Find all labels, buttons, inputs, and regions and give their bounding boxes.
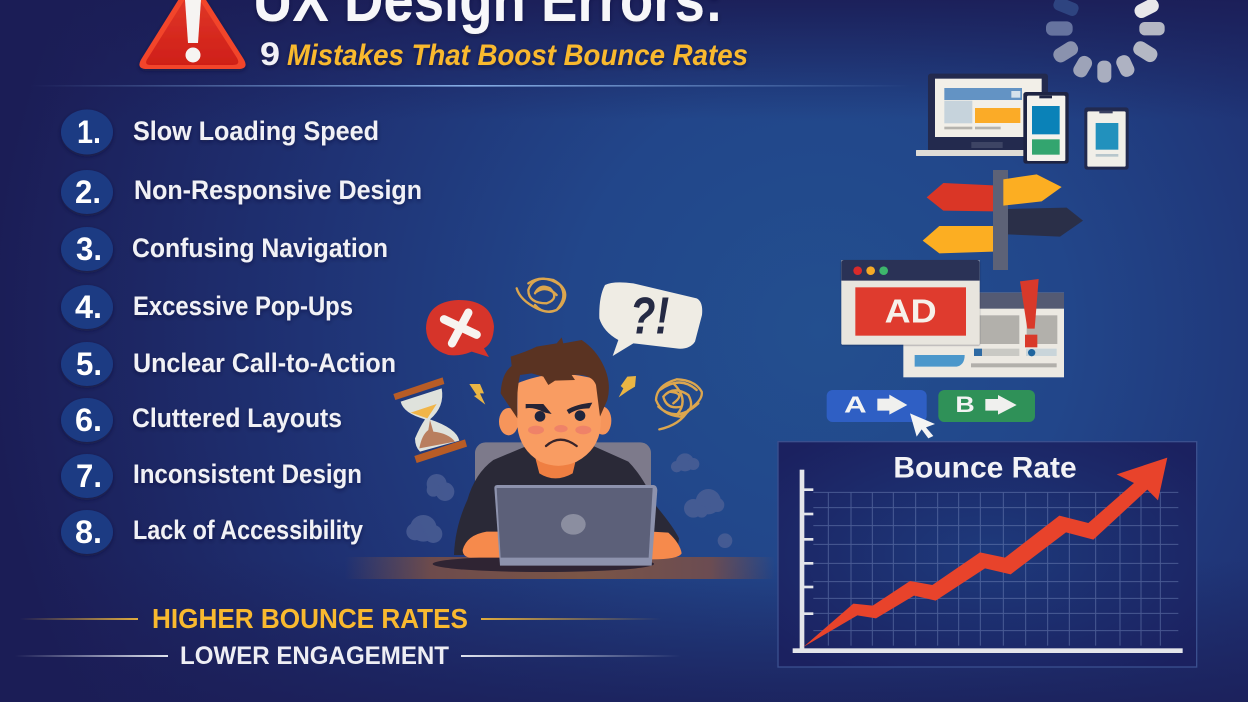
- torso: [454, 446, 679, 555]
- front ad window: [841, 260, 980, 345]
- face: [517, 374, 601, 466]
- cross speech bubble: [426, 300, 494, 357]
- illustration: frustrated user at laptop: [393, 279, 732, 572]
- item 1: Slow Loading Speed: 1.: [77, 114, 101, 150]
- item 2: Non-Responsive Design: [61, 170, 422, 214]
- item 4: Excessive Pop-Ups: 4.: [75, 289, 102, 325]
- loading spinner: [1046, 0, 1165, 83]
- item 1: Slow Loading Speed: Slow Loading Speed: [133, 116, 379, 146]
- hourglass: [393, 377, 467, 463]
- callout: higher bounce rates: HIGHER BOUNCE RATES: [152, 603, 468, 634]
- desk shadow: [433, 556, 654, 572]
- button B: B: [955, 392, 975, 417]
- signpost: [923, 170, 1083, 270]
- item 6: Cluttered Layouts: [61, 398, 342, 442]
- item 5: Unclear Call-to-Action: [61, 342, 396, 386]
- scribble top: [517, 279, 565, 312]
- grid: [813, 492, 1178, 646]
- item 8: Lack of Accessibility: Lack of Accessibility: [133, 515, 363, 545]
- item 6: Cluttered Layouts: Cluttered Layouts: [132, 403, 342, 433]
- item 7: Inconsistent Design: [61, 454, 362, 498]
- phone right: [1084, 107, 1129, 170]
- gold sign top: [1003, 174, 1062, 206]
- neck: [535, 457, 577, 478]
- dark sign: [1007, 208, 1083, 237]
- item 5: Unclear Call-to-Action: 5.: [76, 346, 102, 382]
- item 8: Lack of Accessibility: [61, 510, 363, 554]
- item 4: Excessive Pop-Ups: [61, 285, 353, 329]
- question speech bubble: [599, 282, 702, 356]
- item 8: Lack of Accessibility: 8.: [75, 514, 102, 550]
- red sign: [927, 183, 993, 211]
- eyes: [535, 410, 585, 422]
- responsive devices: [916, 74, 1129, 170]
- hair: [501, 337, 609, 418]
- lightning bolts: [469, 376, 636, 405]
- ears: [499, 407, 611, 435]
- item 3: Confusing Navigation: [61, 227, 388, 271]
- rising red arrow: [803, 458, 1167, 647]
- item 1: Slow Loading Speed: [61, 110, 379, 154]
- subtitle: 9: [260, 36, 280, 72]
- item 2: Non-Responsive Design: Non-Responsive Design: [134, 175, 422, 205]
- chart title: Bounce Rate: [893, 452, 1077, 485]
- hands: [463, 532, 682, 559]
- item 4: Excessive Pop-Ups: Excessive Pop-Ups: [133, 291, 353, 321]
- question speech bubble: ?!: [630, 287, 669, 345]
- item 3: Confusing Navigation: Confusing Navigation: [132, 233, 388, 263]
- button A: A: [844, 392, 867, 418]
- icon: warning triangle: [139, 0, 246, 69]
- item 7: Inconsistent Design: Inconsistent Design: [133, 459, 362, 489]
- eyebrows: [526, 403, 592, 414]
- desk: [345, 557, 775, 579]
- cursor: [910, 413, 935, 438]
- item 6: Cluttered Layouts: 6.: [75, 402, 102, 438]
- item 7: Inconsistent Design: 7.: [76, 458, 102, 494]
- A/B test buttons: [827, 390, 1035, 438]
- mouth: [546, 440, 577, 446]
- panel: bounce rate chart: [778, 442, 1197, 667]
- front ad window: AD: [885, 294, 937, 331]
- exclamation mark: [1020, 279, 1039, 347]
- axes: [793, 470, 1183, 653]
- item 2: Non-Responsive Design: 2.: [75, 174, 101, 210]
- button A: [827, 390, 927, 422]
- list of mistakes: [61, 110, 422, 554]
- button B: [938, 390, 1035, 422]
- item 3: Confusing Navigation: 3.: [76, 231, 102, 267]
- subtitle: Mistakes That Boost Bounce Rates: [287, 39, 748, 72]
- cheeks and nose: [528, 425, 591, 434]
- back window: [903, 293, 1064, 377]
- gold sign bottom: [923, 226, 993, 253]
- laptop: [494, 485, 657, 566]
- phone front: [1023, 92, 1069, 164]
- pop-up ad windows: [841, 260, 1064, 377]
- header divider: [30, 85, 910, 87]
- post: [993, 170, 1008, 270]
- smoke clouds: [406, 453, 732, 548]
- scribble right: [656, 379, 702, 429]
- item 5: Unclear Call-to-Action: Unclear Call-to-Action: [133, 348, 396, 378]
- chair: [475, 442, 651, 509]
- laptop device: [916, 74, 1048, 156]
- callout: lower engagement: LOWER ENGAGEMENT: [180, 642, 449, 670]
